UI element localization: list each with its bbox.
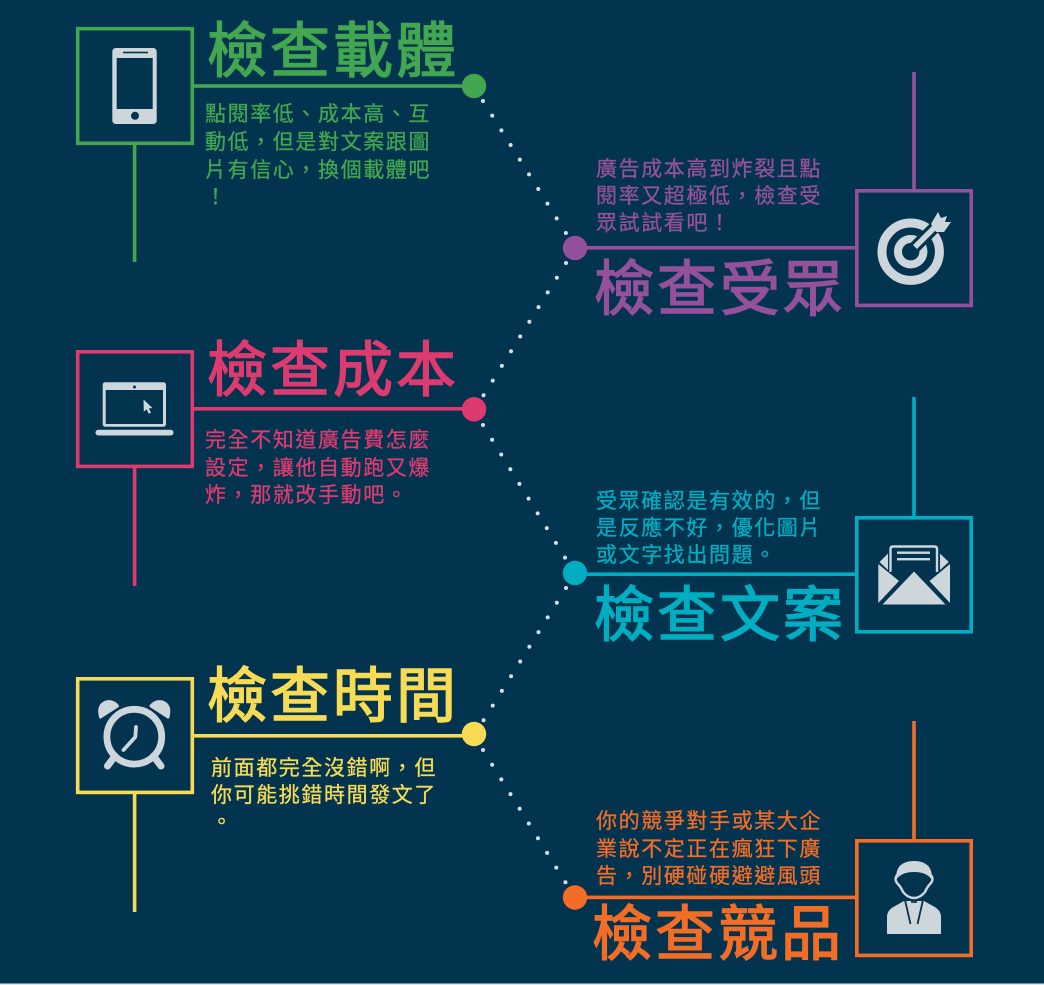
heading: 檢查載體: 檢查載體 bbox=[207, 18, 459, 85]
text block: 檢查競品 description: 業說不定正在瘋狂下廣 bbox=[596, 838, 822, 861]
icon: target with arrow bbox=[882, 212, 951, 280]
text block: 檢查載體 description: 動低，但是對文案跟圖 bbox=[205, 131, 431, 154]
heading: 檢查競品: 檢查競品 bbox=[592, 901, 844, 968]
heading: 檢查文案: 檢查文案 bbox=[594, 582, 846, 649]
panel: 檢查載體 bbox=[78, 18, 486, 262]
text block: 檢查時間 description: 你可能挑錯時間發文了 bbox=[211, 784, 437, 807]
icon: laptop with cursor bbox=[96, 382, 174, 436]
text block: 檢查載體 description: 點閱率低、成本高、互 bbox=[205, 103, 431, 126]
icon: smartphone bbox=[112, 48, 157, 124]
text block: 檢查時間 description: 前面都完全沒錯啊，但 bbox=[211, 757, 437, 780]
text block: 檢查文案 description: 或文字找出問題。 bbox=[596, 544, 777, 567]
text block: 檢查成本 description: 設定，讓他自動跑又爆 bbox=[205, 457, 431, 480]
text block: 檢查競品 description: 告，別硬碰硬避避風頭 bbox=[596, 865, 822, 888]
text block: 檢查成本 description: 炸，那就改手動吧。 bbox=[205, 484, 408, 507]
heading: 檢查成本: 檢查成本 bbox=[207, 337, 459, 404]
heading: 檢查時間: 檢查時間 bbox=[207, 663, 459, 730]
text block: 檢查受眾 description: 廣告成本高到炸裂且點 bbox=[596, 158, 822, 181]
dotted connector path bbox=[482, 101, 566, 884]
text block: 檢查受眾 description: 閱率又超極低，檢查受 bbox=[596, 185, 822, 208]
text block: 檢查受眾 description: 眾試試看吧！ bbox=[596, 212, 732, 235]
icon: alarm clock bbox=[100, 702, 169, 766]
panel: 檢查文案 bbox=[563, 397, 971, 649]
text block: 檢查載體 description: 片有信心，換個載體吧 bbox=[205, 159, 431, 182]
text block: 檢查文案 description: 是反應不好，優化圖片 bbox=[596, 516, 822, 540]
text block: 檢查文案 description: 受眾確認是有效的，但 bbox=[596, 490, 822, 513]
panel: 檢查成本 bbox=[78, 337, 486, 586]
icon: businessman bbox=[887, 861, 941, 934]
panel: 檢查時間 bbox=[78, 663, 486, 912]
icon: open envelope bbox=[878, 546, 950, 604]
panel: 檢查競品 bbox=[563, 721, 971, 968]
text block: 檢查載體 description: ！ bbox=[205, 186, 228, 209]
text block: 檢查成本 description: 完全不知道廣告費怎麼 bbox=[205, 429, 431, 452]
text block: 檢查競品 description: 你的競爭對手或某大企 bbox=[596, 810, 822, 833]
text block: 檢查時間 description: 。 bbox=[211, 811, 234, 834]
heading: 檢查受眾: 檢查受眾 bbox=[594, 256, 846, 323]
panel: 檢查受眾 bbox=[563, 72, 971, 323]
